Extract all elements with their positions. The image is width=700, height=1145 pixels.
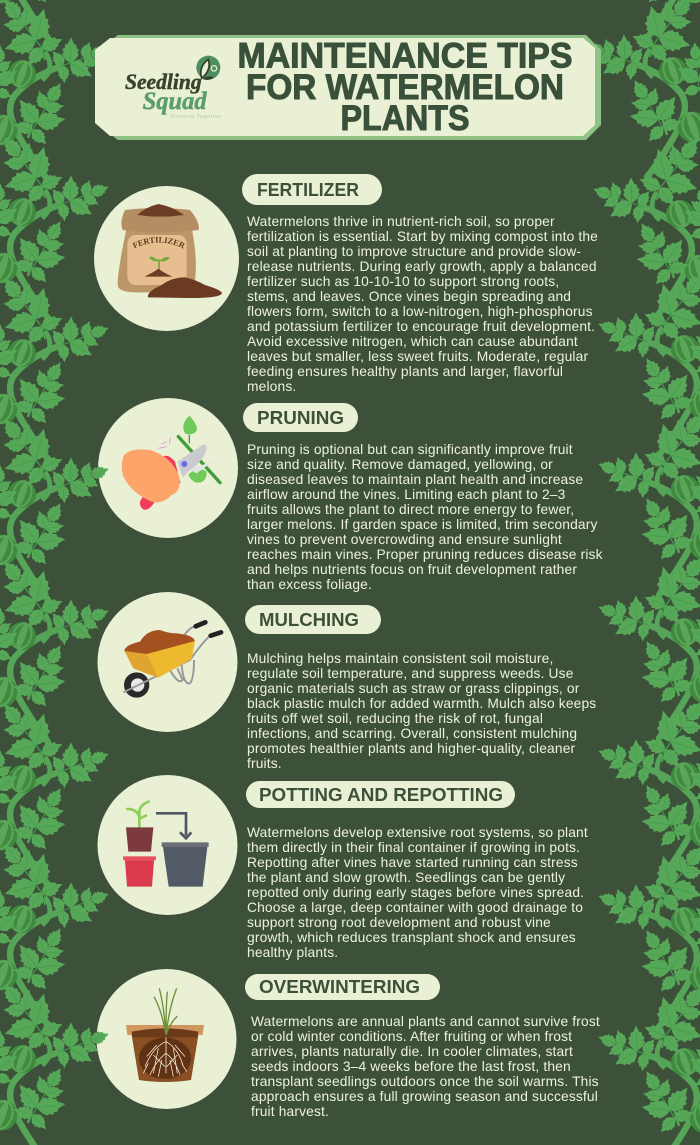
text: potting: Repotting after vines have started running can stress	[247, 855, 578, 870]
text: overwintering: Watermelons are annual plants and cannot survive frost	[251, 1014, 600, 1029]
title	[238, 36, 572, 138]
icon: potting and repotting	[123, 802, 209, 887]
text: pruning: Pruning is optional but can significantly improve fruit	[247, 442, 573, 457]
text: pruning: reaches main vines. Proper pruning reduces disease risk	[247, 547, 603, 562]
text: fertilizer: fertilization is essential. Start by mixing compost into the	[247, 229, 598, 244]
text: fertilizer: flowers form, switch to a low-nitrogen, high-phosphorus	[247, 304, 593, 319]
text: overwintering: transplant seedlings outdoors once the soil warms. This	[251, 1074, 599, 1089]
text: fertilizer: Avoid excessive nitrogen, which can cause abundant	[247, 334, 578, 349]
text: overwintering: or cold winter conditions. After fruiting or when frost	[251, 1029, 572, 1044]
title: PLANTS	[340, 99, 470, 138]
icon circle: pruning backdrop	[98, 398, 238, 538]
section: overwintering	[245, 974, 604, 1119]
icon circle: fertilizer backdrop	[94, 186, 239, 331]
text: potting: growth, which reduces transplant shock and ensures	[247, 930, 576, 945]
icon circle: mulching backdrop	[98, 592, 238, 732]
heading pill: potting and repotting	[246, 781, 515, 808]
heading pill: fertilizer: FERTILIZER	[257, 180, 359, 200]
title: FOR WATERMELON	[246, 68, 564, 107]
text: fertilizer: fertilizer such as 10-10-10 to support strong roots,	[247, 274, 559, 289]
text: potting: Watermelons develop extensive root systems, so plant	[247, 825, 588, 840]
text: mulching: fruits.	[247, 756, 282, 771]
icon: wheelbarrow of mulch	[123, 622, 221, 698]
section: fertilizer	[242, 174, 602, 394]
text: pruning: larger melons. If garden space is limited, trim secondary	[247, 517, 598, 532]
section: potting and repotting	[246, 781, 592, 960]
text: pruning: airflow around the vines. Limiting each plant to 2–3	[247, 487, 566, 502]
right vine border	[577, 0, 700, 1145]
logo: Seedling Squad: Seedling	[125, 69, 202, 94]
text: fertilizer: release nutrients. During early growth, apply a balanced	[247, 259, 597, 274]
text: potting: healthy plants.	[247, 945, 338, 960]
text: fertilizer: melons.	[247, 379, 296, 394]
heading pill: overwintering: OVERWINTERING	[259, 977, 420, 997]
text: overwintering: approach ensures a full growing season and successful	[251, 1089, 598, 1104]
heading pill: potting and repotting: POTTING AND REPOTTING	[259, 785, 503, 805]
title: MAINTENANCE TIPS	[238, 36, 572, 76]
text: potting: them directly in their final container if growing in pots.	[247, 840, 580, 855]
icon circle: overwintering backdrop	[96, 969, 236, 1109]
heading pill: fertilizer	[242, 174, 382, 205]
logo: Seedling Squad	[125, 56, 222, 120]
text: mulching: organic materials such as straw or grass clippings, or	[247, 681, 580, 696]
heading pill: pruning	[243, 403, 358, 432]
text: fertilizer: stems, and leaves. Once vines begin spreading and	[247, 289, 571, 304]
text: mulching: Mulching helps maintain consistent soil moisture,	[247, 651, 553, 666]
text: overwintering: fruit harvest.	[251, 1104, 329, 1119]
header banner	[95, 35, 601, 140]
text: pruning: size and quality. Remove damaged, yellowing, or	[247, 457, 553, 472]
heading pill: mulching	[245, 605, 381, 634]
icon: fertilizer bag	[118, 204, 222, 298]
icon: pot with roots	[126, 988, 204, 1082]
text: potting: support strong root development and robust vine	[247, 915, 551, 930]
section: mulching	[245, 605, 600, 771]
text: fertilizer: soil at planting to improve structure and provide slow-	[247, 244, 581, 259]
icon: fertilizer bag: FERTILIZER	[132, 236, 184, 248]
text: overwintering: seeds indoors 3–4 weeks before the last frost, then	[251, 1059, 571, 1074]
icon circle: potting backdrop	[98, 775, 238, 915]
icon: pruning shears and hand	[122, 416, 220, 510]
text: pruning: diseased leaves to maintain plant health and increase	[247, 472, 583, 487]
text: fertilizer: Watermelons thrive in nutrient-rich soil, so proper	[247, 214, 555, 229]
text: mulching: infections, and scarring. Overall, consistent mulching	[247, 726, 577, 741]
text: potting: Choose a large, deep container with good drainage to	[247, 900, 583, 915]
text: pruning: and helps nutrients focus on fruit development rather	[247, 562, 577, 577]
text: overwintering: arrives, plants naturally die. In cooler climates, start	[251, 1044, 573, 1059]
heading pill: pruning: PRUNING	[257, 408, 344, 428]
text: pruning: fruits allows the plant to direct more energy to fewer,	[247, 502, 574, 517]
text: mulching: promotes healthier plants and higher-quality, cleaner	[247, 741, 576, 756]
section: pruning	[243, 403, 607, 592]
heading pill: mulching: MULCHING	[259, 610, 359, 630]
text: mulching: fruits off wet soil, reducing the risk of rot, fungal	[247, 711, 543, 726]
text: fertilizer: leaves but smaller, less sweet fruits. Moderate, regular	[247, 349, 588, 364]
text: potting: the plant and slow growth. Seedlings can be gently	[247, 870, 565, 885]
text: fertilizer: feeding ensures healthy plants and larger, flavorful	[247, 364, 563, 379]
logo: Seedling Squad: Growing Together	[171, 114, 222, 120]
text: mulching: regulate soil temperature, and suppress weeds. Use	[247, 666, 574, 681]
text: mulching: black plastic mulch for added warmth. Mulch also keeps	[247, 696, 596, 711]
text: pruning: than excess foliage.	[247, 577, 372, 592]
heading pill: overwintering	[245, 974, 440, 1000]
text: potting: repotted only during early stages before vines spread.	[247, 885, 584, 900]
logo: Seedling Squad: Squad	[143, 87, 207, 115]
text: fertilizer: and potassium fertilizer to encourage fruit development.	[247, 319, 595, 334]
left vine border	[0, 0, 118, 1145]
text: pruning: vines to prevent overcrowding and ensure sunlight	[247, 532, 562, 547]
